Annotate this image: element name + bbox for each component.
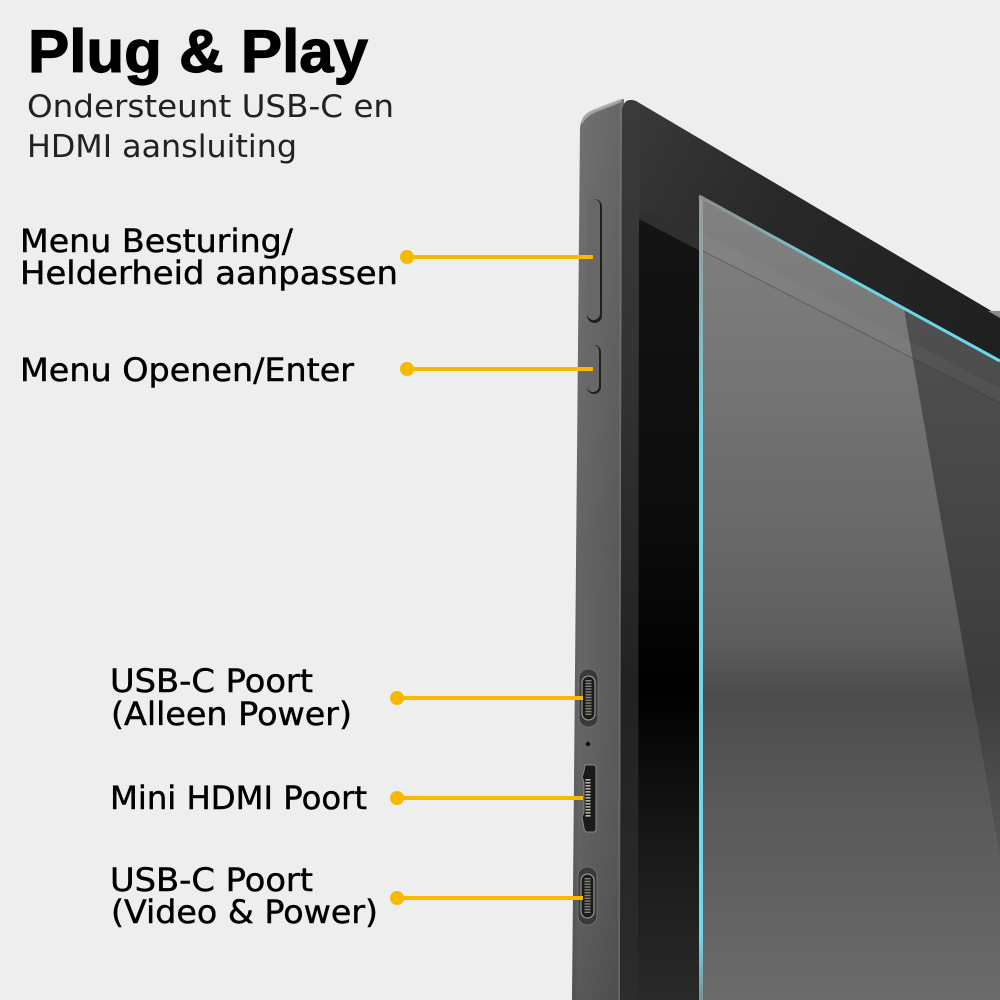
callout line: USB-C power xyxy=(390,691,583,705)
subtitle: Ondersteunt USB-C en xyxy=(27,89,394,125)
callout line: menu control xyxy=(400,250,593,264)
label: USB-C video: (Video & Power) xyxy=(111,893,378,931)
glass band overlay xyxy=(699,232,1000,403)
callout line: mini HDMI xyxy=(390,791,583,805)
label: USB-C power: USB-C Poort xyxy=(110,662,313,700)
subtitle: HDMI aansluiting xyxy=(27,129,297,165)
glass cyan edge top xyxy=(699,196,1000,361)
port: USB-C video xyxy=(578,867,597,925)
label: menu open: Menu Openen/Enter xyxy=(20,351,355,389)
monitor front bezel xyxy=(620,100,1000,1000)
callout line: menu open xyxy=(400,362,593,376)
glass sheet dark area xyxy=(699,196,1000,1000)
port: USB-C power xyxy=(579,669,598,727)
label: menu control: Menu Besturing/ xyxy=(20,222,293,260)
screen black area xyxy=(638,219,702,1000)
title: Plug & Play xyxy=(28,18,369,85)
port: mini HDMI xyxy=(582,765,596,832)
glass cyan edge left xyxy=(699,196,703,1000)
subtitle xyxy=(27,89,394,165)
screen top band xyxy=(639,210,704,252)
button: brightness xyxy=(587,199,602,323)
callout line: USB-C video xyxy=(390,891,583,905)
label: USB-C power: (Alleen Power) xyxy=(111,695,352,733)
label: USB-C video xyxy=(110,861,378,931)
label: USB-C video: USB-C Poort xyxy=(110,861,313,899)
label: mini HDMI: Mini HDMI Poort xyxy=(110,779,367,817)
indicator dot xyxy=(586,742,590,746)
screen edge line xyxy=(699,249,1000,403)
label: menu control xyxy=(20,222,398,292)
label: menu control: Helderheid aanpassen xyxy=(20,254,398,292)
monitor xyxy=(572,99,1000,1000)
monitor side edge xyxy=(572,99,624,1000)
glass reflection xyxy=(699,196,1000,1000)
label: USB-C power xyxy=(110,662,352,733)
button: menu enter xyxy=(587,345,601,394)
